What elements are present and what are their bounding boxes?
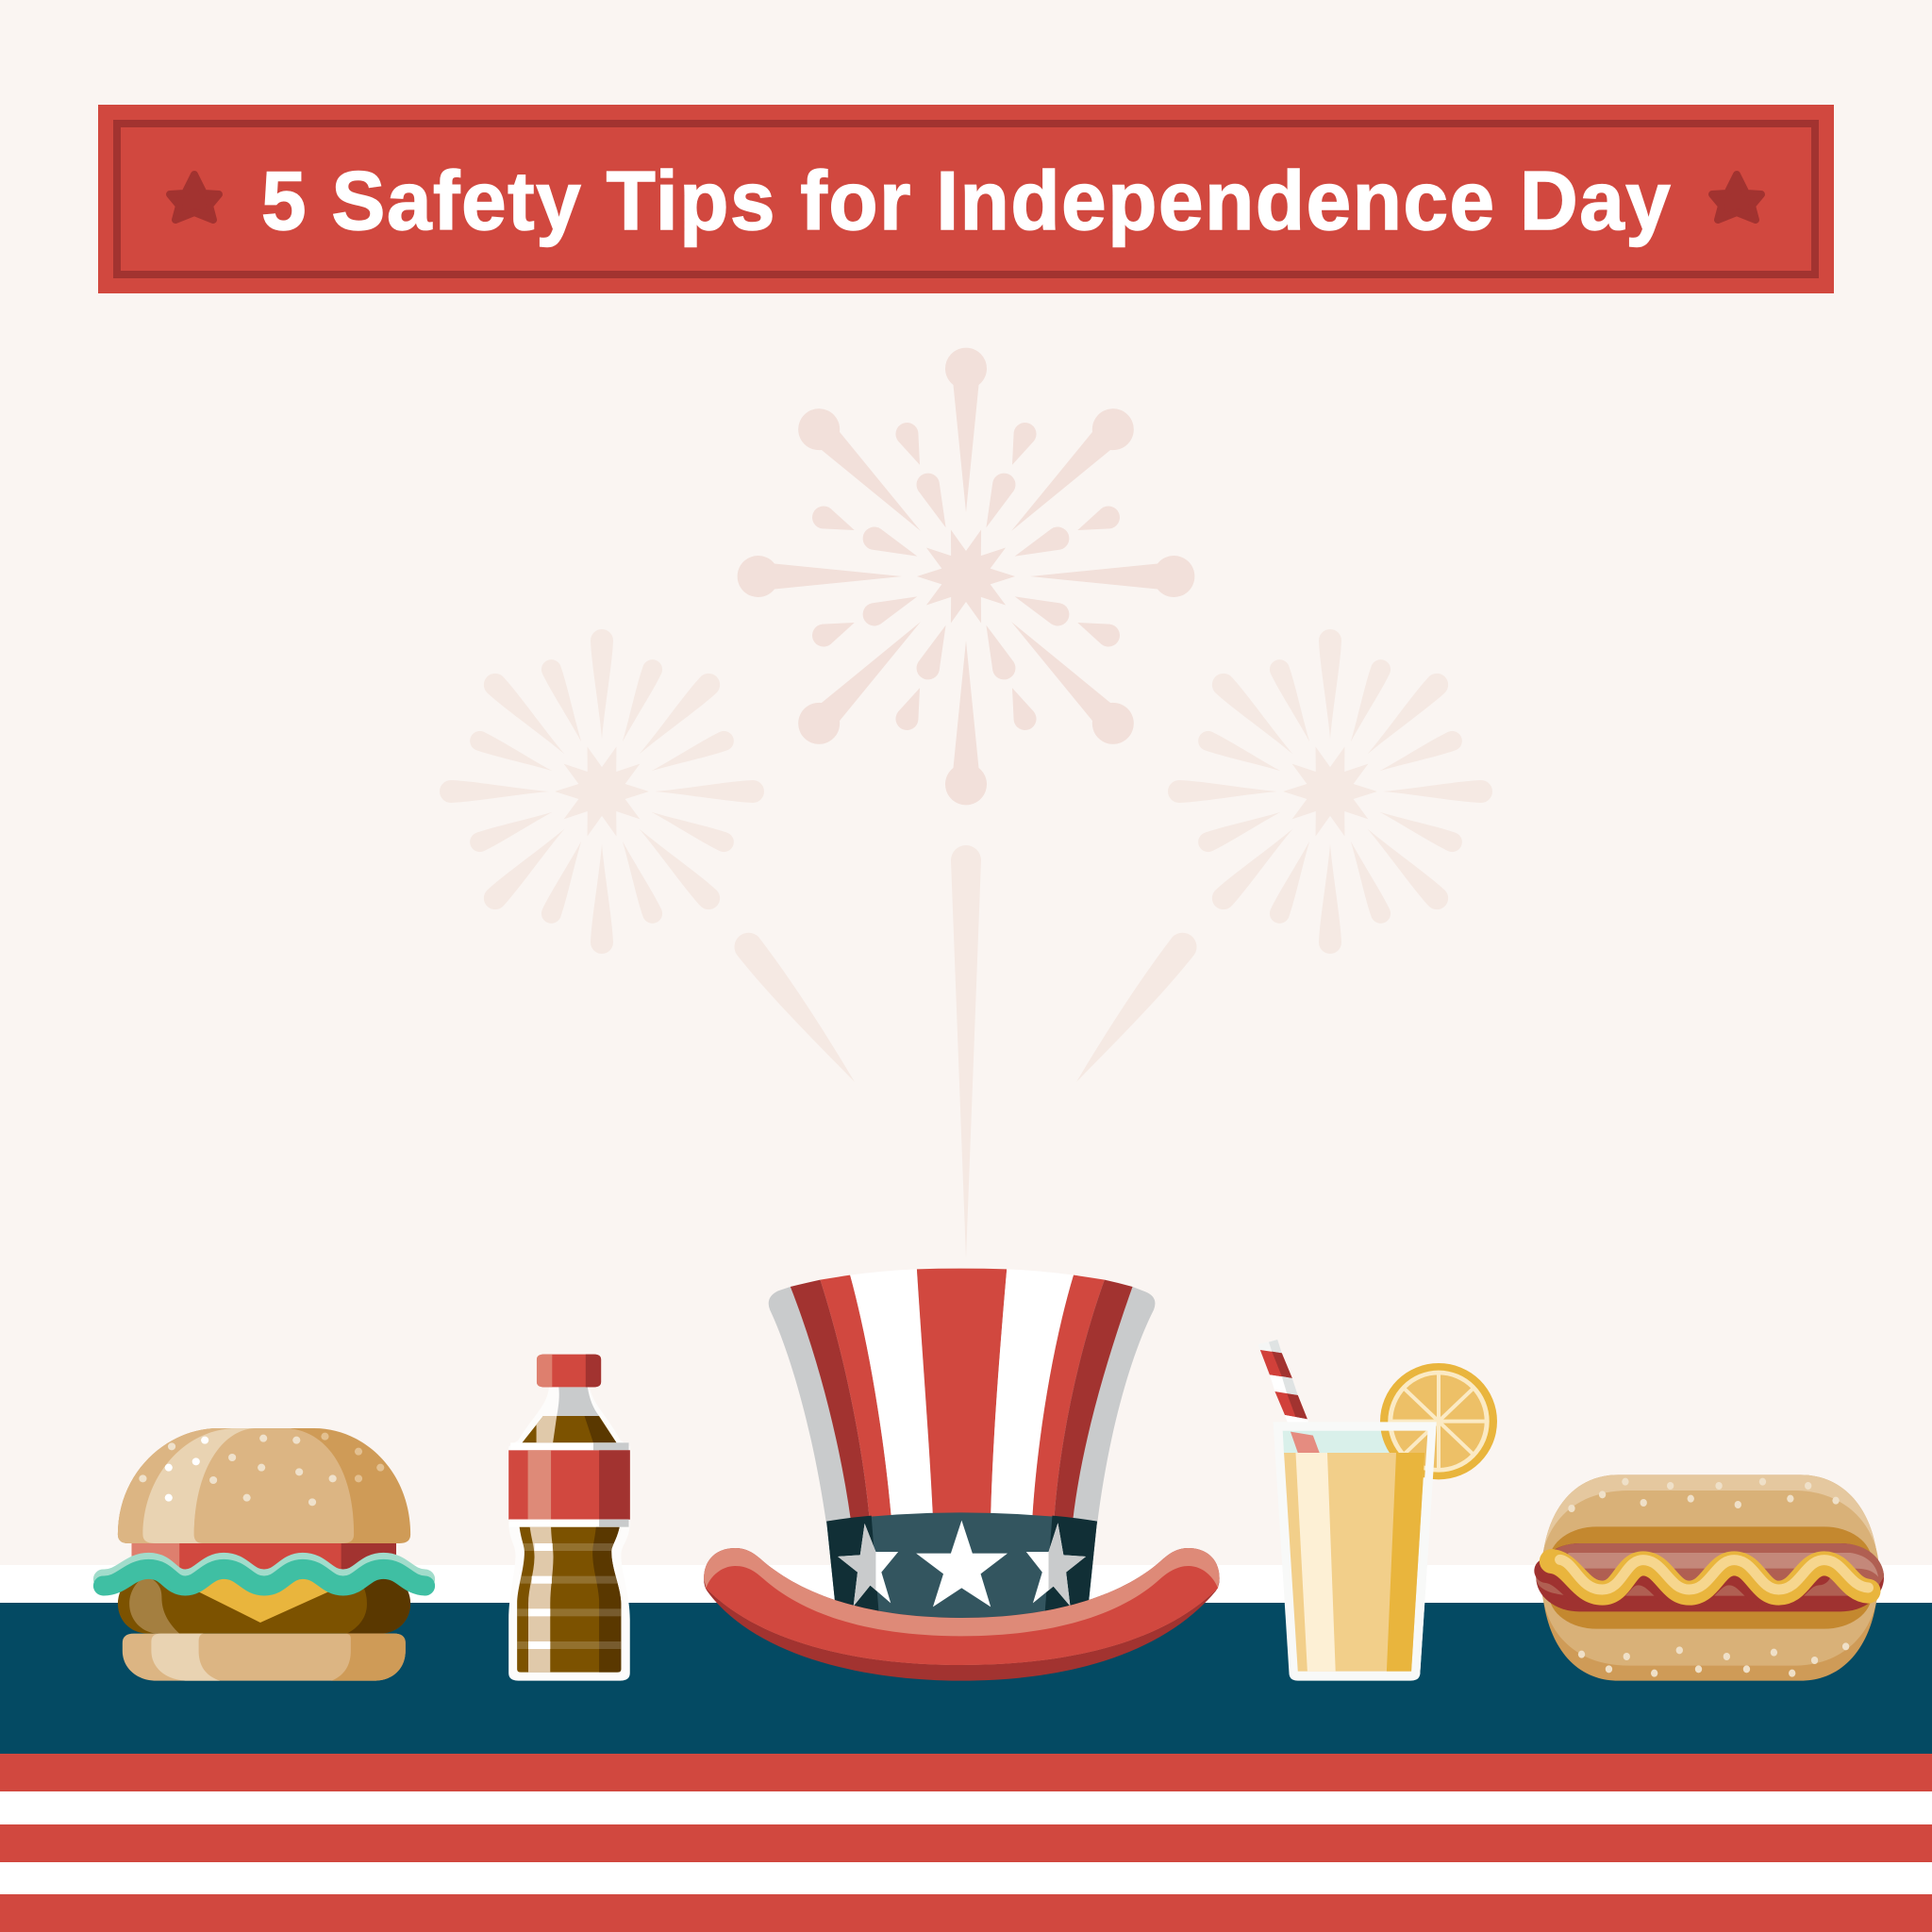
burger: bottom bun [123,1634,406,1681]
hat: crown [769,1269,1155,1525]
glass: lemon slice [1380,1363,1497,1479]
icon: left star [170,175,219,220]
hat: right star [1026,1523,1086,1607]
icon: hot dog [1536,1474,1884,1681]
firework: center [738,348,1194,805]
hat: left star [838,1524,898,1607]
hot dog: sausage [1536,1543,1884,1611]
burger: patty [118,1574,410,1634]
burger: tomato [132,1543,396,1574]
bottle: cap [537,1355,601,1387]
hot dog: mustard [1546,1559,1869,1598]
icon: right star [1712,175,1761,220]
firework: right [1168,629,1492,954]
hot dog: bun [1541,1474,1878,1681]
glass: straw [1258,1340,1311,1431]
title text: 5 Safety Tips for Independence Day [261,156,1671,247]
title banner [98,105,1834,293]
icon: burger [103,1428,425,1681]
rocket trails [735,845,1196,1258]
hat: brim [704,1548,1220,1681]
glass: straw inside [1291,1432,1320,1453]
table: white strip, navy band and stripes [0,1565,1932,1932]
bottle: upper liquid [522,1416,616,1442]
hat: center star [916,1521,1008,1607]
glass: liquid [1284,1453,1424,1672]
bottle: outline [508,1387,630,1681]
icon: soda bottle [507,1355,634,1681]
burger: top bun [118,1428,410,1543]
burger: cheese [191,1575,333,1623]
bottle: neck [557,1387,599,1416]
bottle: lower liquid [517,1526,621,1673]
glass: air above liquid [1283,1431,1428,1455]
hat: star band [826,1512,1097,1618]
bottle: label [508,1442,630,1527]
glass: rim and right wall [1274,1422,1437,1676]
burger: lettuce [103,1562,425,1586]
icon: lemonade glass [1258,1340,1497,1681]
icon: uncle sam hat [704,1269,1220,1681]
glass: body [1274,1422,1437,1681]
firework: left [440,629,764,954]
